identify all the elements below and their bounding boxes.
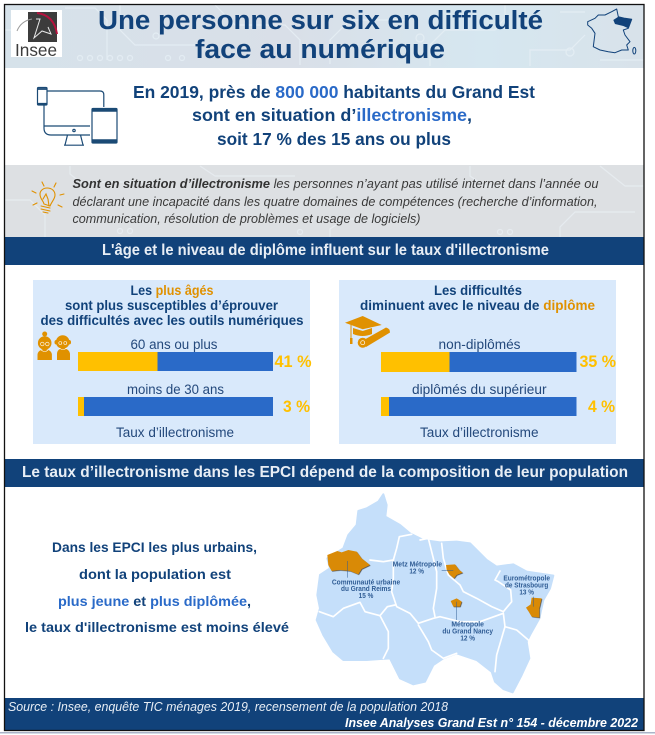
bar: no diploma, 35 percent xyxy=(381,352,616,372)
text: EPCI message: le taux d'illectronisme est moins élevé xyxy=(25,619,289,635)
title xyxy=(98,7,543,64)
heading: diploma chart: diminuent avec le niveau de diplôme xyxy=(360,298,595,313)
panel: header banner xyxy=(5,5,644,68)
heading: EPCI section xyxy=(5,459,644,487)
icon: Insee logo xyxy=(11,10,62,60)
bar: higher education, 4 percent xyxy=(381,397,615,416)
labels: de Strasbourg xyxy=(505,580,549,589)
labels: 12 % xyxy=(460,633,475,642)
icon: light bulb xyxy=(32,182,64,213)
panel: definition xyxy=(5,165,644,237)
heading: age and diploma section: L'âge et le niveau de diplôme influent sur le taux d'illectronisme xyxy=(102,242,549,259)
labels: du Grand Nancy xyxy=(442,626,494,635)
bar: under 30 years, 3 percent xyxy=(78,397,310,416)
icon: phone, computer and tablet xyxy=(38,88,117,145)
heading: age chart: sont plus susceptibles d’éprouver xyxy=(65,298,279,313)
bar: under 30 years, 3 percent: 3 % xyxy=(283,398,310,416)
text: EPCI message: Dans les EPCI les plus urbains, xyxy=(52,539,257,555)
labels: du Grand Reims xyxy=(341,584,391,593)
bar: 60 years or more, 41 percent xyxy=(78,352,312,371)
text: age chart axis label: Taux d’illectronisme xyxy=(116,425,234,440)
text: label higher education graduates: diplômés du supérieur xyxy=(412,382,547,397)
heading: diploma chart: Les difficultés xyxy=(434,283,522,298)
map: EPCI of Grand Est xyxy=(317,494,553,692)
text: definition xyxy=(72,176,598,226)
region outline xyxy=(317,494,553,692)
text: diploma chart axis label: Taux d’illectronisme xyxy=(420,425,538,440)
labels: Metz Métropole xyxy=(393,560,442,569)
panel: footer xyxy=(5,698,644,730)
text: EPCI message: dont la population est xyxy=(79,566,231,582)
heading: age chart: Les plus âgés xyxy=(130,283,214,298)
text: key figure statement: En 2019, près de 800 000 habitants du Grand Est xyxy=(133,82,535,102)
labels: 13 % xyxy=(519,587,534,596)
labels: Communauté urbaine xyxy=(332,577,400,586)
title: Une personne sur six en difficulté xyxy=(98,7,543,35)
text: definition: communication, résolution de problèmes et usage de logiciels) xyxy=(72,211,420,226)
text: EPCI message: plus jeune et plus diplômée, xyxy=(58,593,251,609)
text: label no diploma: non-diplômés xyxy=(438,337,521,352)
labels: 12 % xyxy=(409,567,424,576)
labels: Métropole xyxy=(451,620,484,629)
text: key figure statement xyxy=(133,82,535,149)
heading: age chart: des difficultés avec les outils numériques xyxy=(40,313,304,328)
panel: age chart xyxy=(33,280,312,444)
bar: no diploma, 35 percent: 35 % xyxy=(580,353,616,371)
text: key figure statement: soit 17 % des 15 ans ou plus xyxy=(217,129,451,149)
text: definition: déclarant une incapacité dans les quatre domaines de compétences (recherche d’information, xyxy=(72,194,598,209)
bar: 60 years or more, 41 percent: 41 % xyxy=(274,353,312,371)
text: label 60 years or more: 60 ans ou plus xyxy=(130,337,218,352)
EPCI: highlighted areas xyxy=(327,550,542,618)
heading: age and diploma section xyxy=(5,237,644,265)
text: EPCI message xyxy=(25,539,289,635)
text: key figure statement: sont en situation d’illectronisme, xyxy=(192,105,472,125)
icon: graduation cap and diploma xyxy=(345,316,390,348)
text: label under 30 years: moins de 30 ans xyxy=(127,382,224,397)
panel: diploma chart xyxy=(339,280,616,444)
text: publication reference: Insee Analyses Grand Est n° 154 - décembre 2022 xyxy=(345,715,639,730)
heading: age chart xyxy=(40,283,304,328)
text: definition: Sont en situation d’illectronisme les personnes n’ayant pas utilisé internet dans l’année ou xyxy=(72,176,598,191)
heading: EPCI section: Le taux d’illectronisme dans les EPCI dépend de la composition de leur population xyxy=(22,464,628,481)
icon: elderly couple xyxy=(38,332,71,360)
labels: 15 % xyxy=(359,591,373,600)
text: source: Source : Insee, enquête TIC ménages 2019, recensement de la population 2018 xyxy=(8,699,449,714)
labels: Eurométropole xyxy=(503,574,550,583)
panel: key figure xyxy=(38,82,535,149)
labels xyxy=(332,560,550,642)
heading: diploma chart xyxy=(360,283,595,313)
title: face au numérique xyxy=(195,36,445,64)
icon: map of France with Grand Est highlighted xyxy=(588,9,636,54)
icon: Insee logo: Insee xyxy=(15,40,57,60)
bar: higher education, 4 percent: 4 % xyxy=(588,398,615,416)
